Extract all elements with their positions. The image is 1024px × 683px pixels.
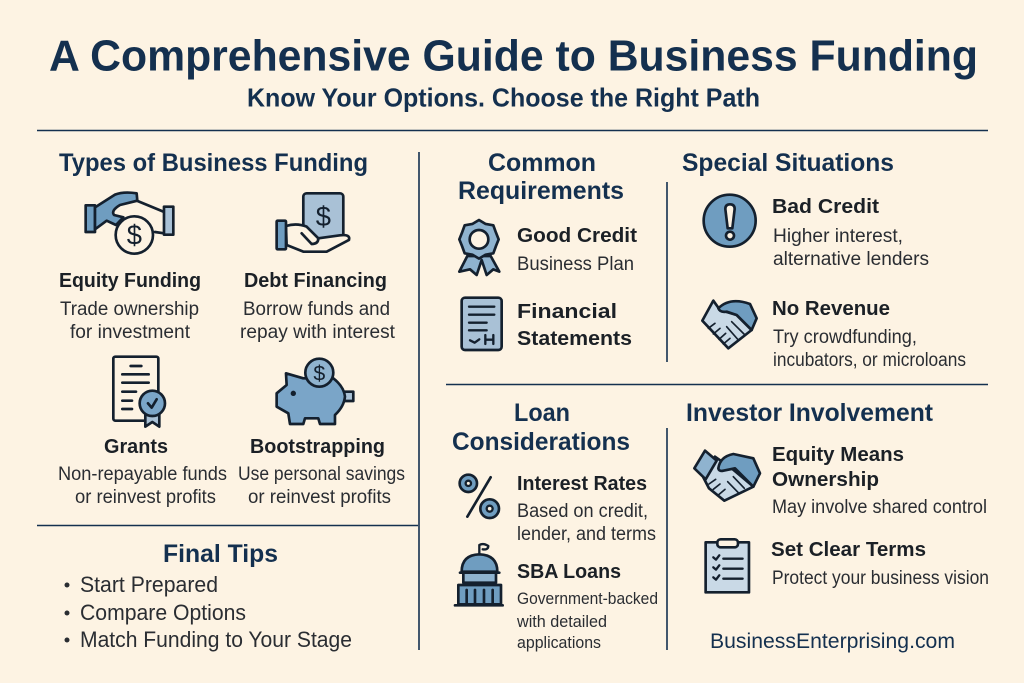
list: tips — [64, 572, 352, 652]
text: sba loans description — [516, 589, 658, 652]
label: no revenue: No Revenue — [772, 298, 890, 320]
label: financial statements: Statements — [517, 328, 632, 350]
panel: types of business funding — [58, 149, 405, 508]
label: bootstrapping: Bootstrapping — [250, 436, 385, 458]
label: financial statements — [517, 301, 632, 350]
heading: common requirements: Requirements — [458, 177, 624, 205]
icon: piggy bank with coin — [277, 359, 353, 424]
text: no revenue description: Try crowdfunding, — [773, 327, 917, 348]
label: good credit: Good Credit — [517, 225, 637, 247]
subtitle: Know Your Options. Choose the Right Path — [247, 82, 760, 112]
text: sba loans description: Government-backed — [517, 589, 658, 608]
label: set clear terms: Set Clear Terms — [771, 539, 926, 561]
heading: types of business funding: Types of Business Funding — [59, 149, 368, 177]
panel: loan considerations — [452, 399, 658, 652]
list: tips: Compare Options — [80, 600, 246, 625]
heading: final tips: Final Tips — [163, 540, 278, 568]
heading: loan considerations: Considerations — [452, 428, 630, 456]
text: equity funding description — [60, 299, 199, 343]
icon: debt financing hand and bill: $ — [316, 201, 331, 232]
text: business plan: Business Plan — [517, 254, 634, 275]
text: bootstrapping description: or reinvest profits — [248, 487, 391, 508]
heading: loan considerations: Loan — [514, 399, 570, 427]
text: interest rates description — [517, 501, 656, 545]
text: bad credit description: Higher interest, — [773, 226, 903, 247]
icon: capitol building — [455, 544, 503, 605]
icon: handshake — [702, 301, 757, 348]
heading: common requirements: Common — [488, 149, 596, 177]
panel: final tips — [64, 540, 352, 652]
panel: investor involvement — [686, 399, 989, 592]
label: debt financing: Debt Financing — [244, 270, 387, 292]
icon: award ribbon — [459, 220, 499, 275]
label: bad credit: Bad Credit — [772, 196, 879, 218]
label: sba loans: SBA Loans — [517, 561, 621, 583]
label: financial statements: Financial — [517, 301, 617, 323]
title: A Comprehensive Guide to Business Funding — [49, 32, 978, 80]
website footer: BusinessEnterprising.com — [710, 630, 955, 653]
icon: equity funding hand and coin: $ — [127, 220, 142, 251]
label: interest rates: Interest Rates — [517, 473, 647, 495]
label: equity means ownership: Equity Means — [772, 444, 904, 466]
text: grants description: Non-repayable funds — [58, 464, 227, 485]
text: interest rates description: Based on credit, — [517, 501, 648, 522]
text: debt financing description: repay with interest — [240, 322, 396, 343]
text: shared control: May involve shared control — [772, 497, 987, 518]
label: grants: Grants — [104, 436, 168, 458]
text: no revenue description: incubators, or microloans — [773, 350, 966, 371]
heading: special situations: Special Situations — [682, 149, 894, 177]
icon: percent — [460, 475, 499, 518]
icon: equity funding hand and coin — [86, 193, 173, 254]
text: debt financing description: Borrow funds and — [243, 299, 390, 320]
label: equity funding: Equity Funding — [59, 270, 201, 292]
text: protect your business vision: Protect your business vision — [772, 568, 989, 589]
icon: financial statement — [462, 298, 502, 350]
icon: grant document with seal — [113, 357, 165, 427]
text: interest rates description: lender, and terms — [517, 524, 656, 545]
text: grants description: or reinvest profits — [75, 487, 216, 508]
icon: clipboard checklist — [706, 539, 749, 592]
text: equity funding description: for investment — [70, 322, 191, 343]
icon: piggy bank with coin: $ — [313, 362, 325, 386]
text: no revenue description — [773, 327, 966, 371]
icon: handshake — [694, 451, 760, 501]
text: grants description — [58, 464, 227, 508]
heading: loan considerations — [452, 399, 630, 456]
text: bootstrapping description — [238, 464, 405, 508]
text: bootstrapping description: Use personal savings — [238, 464, 405, 485]
panel: common requirements — [458, 149, 637, 350]
text: bad credit description: alternative lenders — [773, 249, 929, 270]
heading: investor involvement: Investor Involvement — [686, 399, 934, 427]
text: bad credit description — [773, 226, 929, 270]
label: equity means ownership: Ownership — [772, 469, 879, 491]
heading: common requirements — [458, 149, 624, 205]
panel: special situations — [682, 149, 966, 371]
list: tips: Start Prepared — [80, 572, 218, 597]
text: sba loans description: with detailed — [516, 612, 607, 631]
text: equity funding description: Trade ownership — [60, 299, 199, 320]
list: tips: Match Funding to Your Stage — [80, 627, 352, 652]
label: equity means ownership — [772, 444, 904, 491]
icon: exclamation warning — [704, 195, 756, 247]
text: sba loans description: applications — [517, 633, 601, 652]
icon: debt financing hand and bill — [277, 193, 349, 252]
text: debt financing description — [240, 299, 396, 343]
